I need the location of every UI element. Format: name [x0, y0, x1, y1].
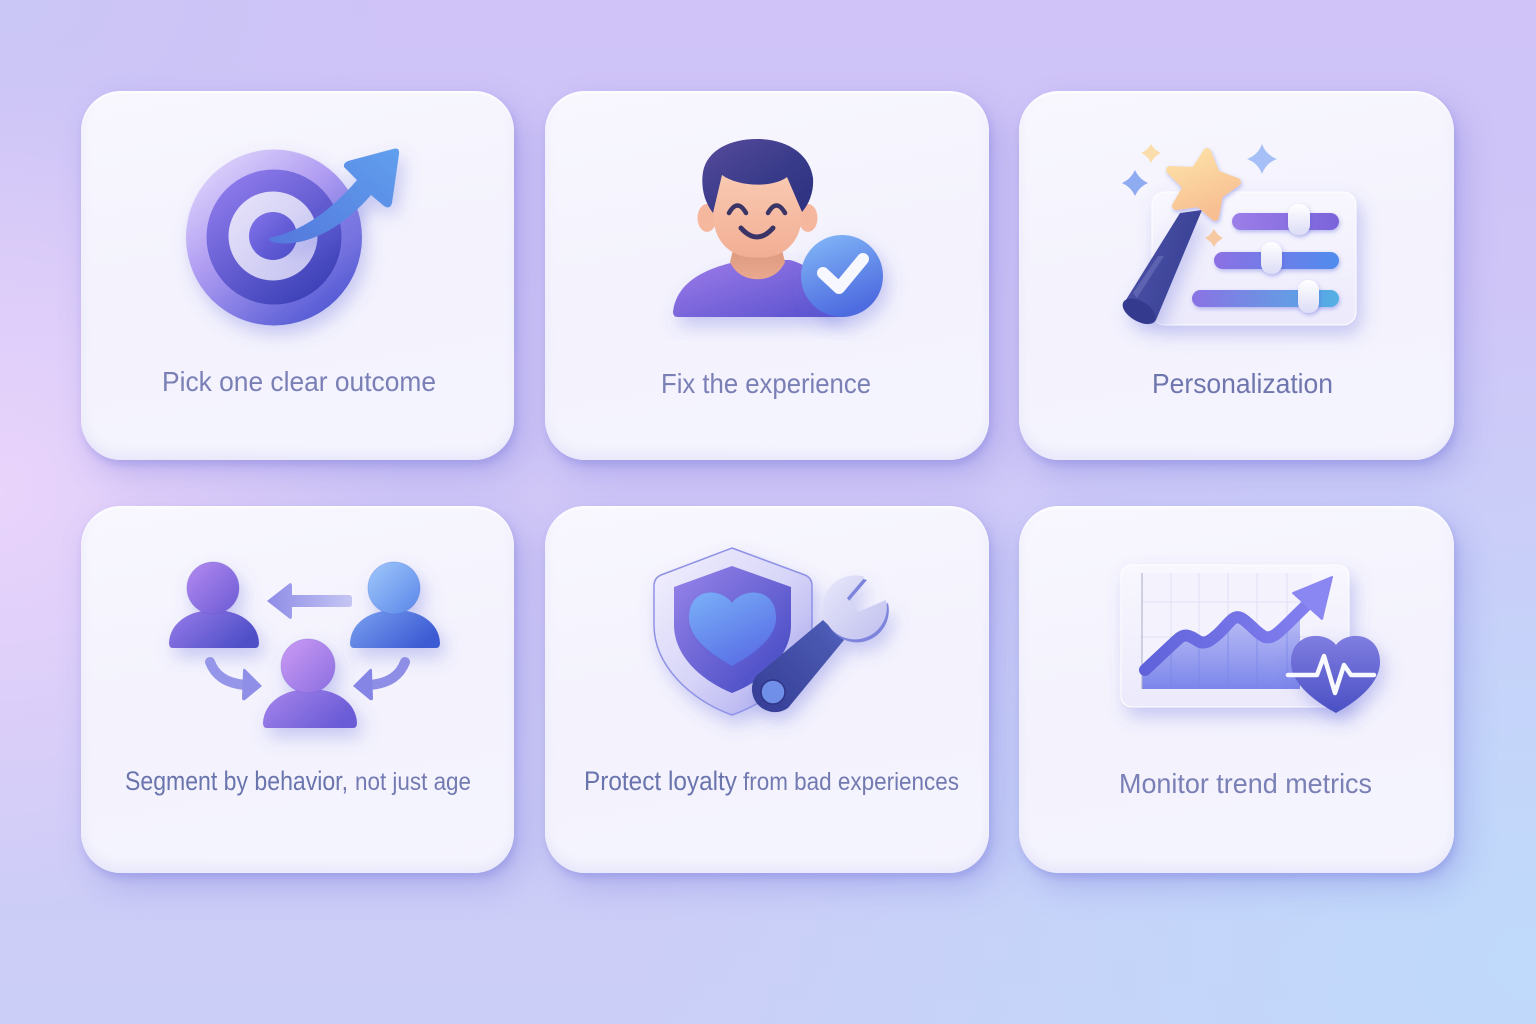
- label: not just age: [355, 768, 471, 796]
- label: Fix the experience: [661, 368, 871, 399]
- icon: target with arrow: [186, 149, 399, 326]
- panel: Personalization: [1019, 91, 1454, 460]
- icon: smiling person with check badge: [673, 139, 883, 317]
- icon: three user segments with arrows: [169, 562, 440, 728]
- icon: magic wand with sliders: [1118, 144, 1356, 329]
- icon: trend chart with heartbeat: [1121, 565, 1380, 713]
- label: Pick one clear outcome: [162, 366, 436, 397]
- label: from bad experiences: [743, 768, 959, 796]
- label: Protect loyalty: [584, 766, 737, 796]
- panel: Monitor trend metrics: [1019, 506, 1454, 873]
- label: Monitor trend metrics: [1119, 768, 1372, 799]
- panel: Protect loyalty: [545, 506, 989, 873]
- icon: shield with heart and wrench: [654, 548, 889, 715]
- label: Personalization: [1152, 368, 1333, 399]
- panel: Segment by behavior: [81, 506, 514, 873]
- label: Segment by behavior,: [125, 766, 348, 796]
- panel: Pick one clear outcome: [81, 91, 514, 460]
- label: [584, 766, 959, 796]
- panel: Fix the experience: [545, 91, 989, 460]
